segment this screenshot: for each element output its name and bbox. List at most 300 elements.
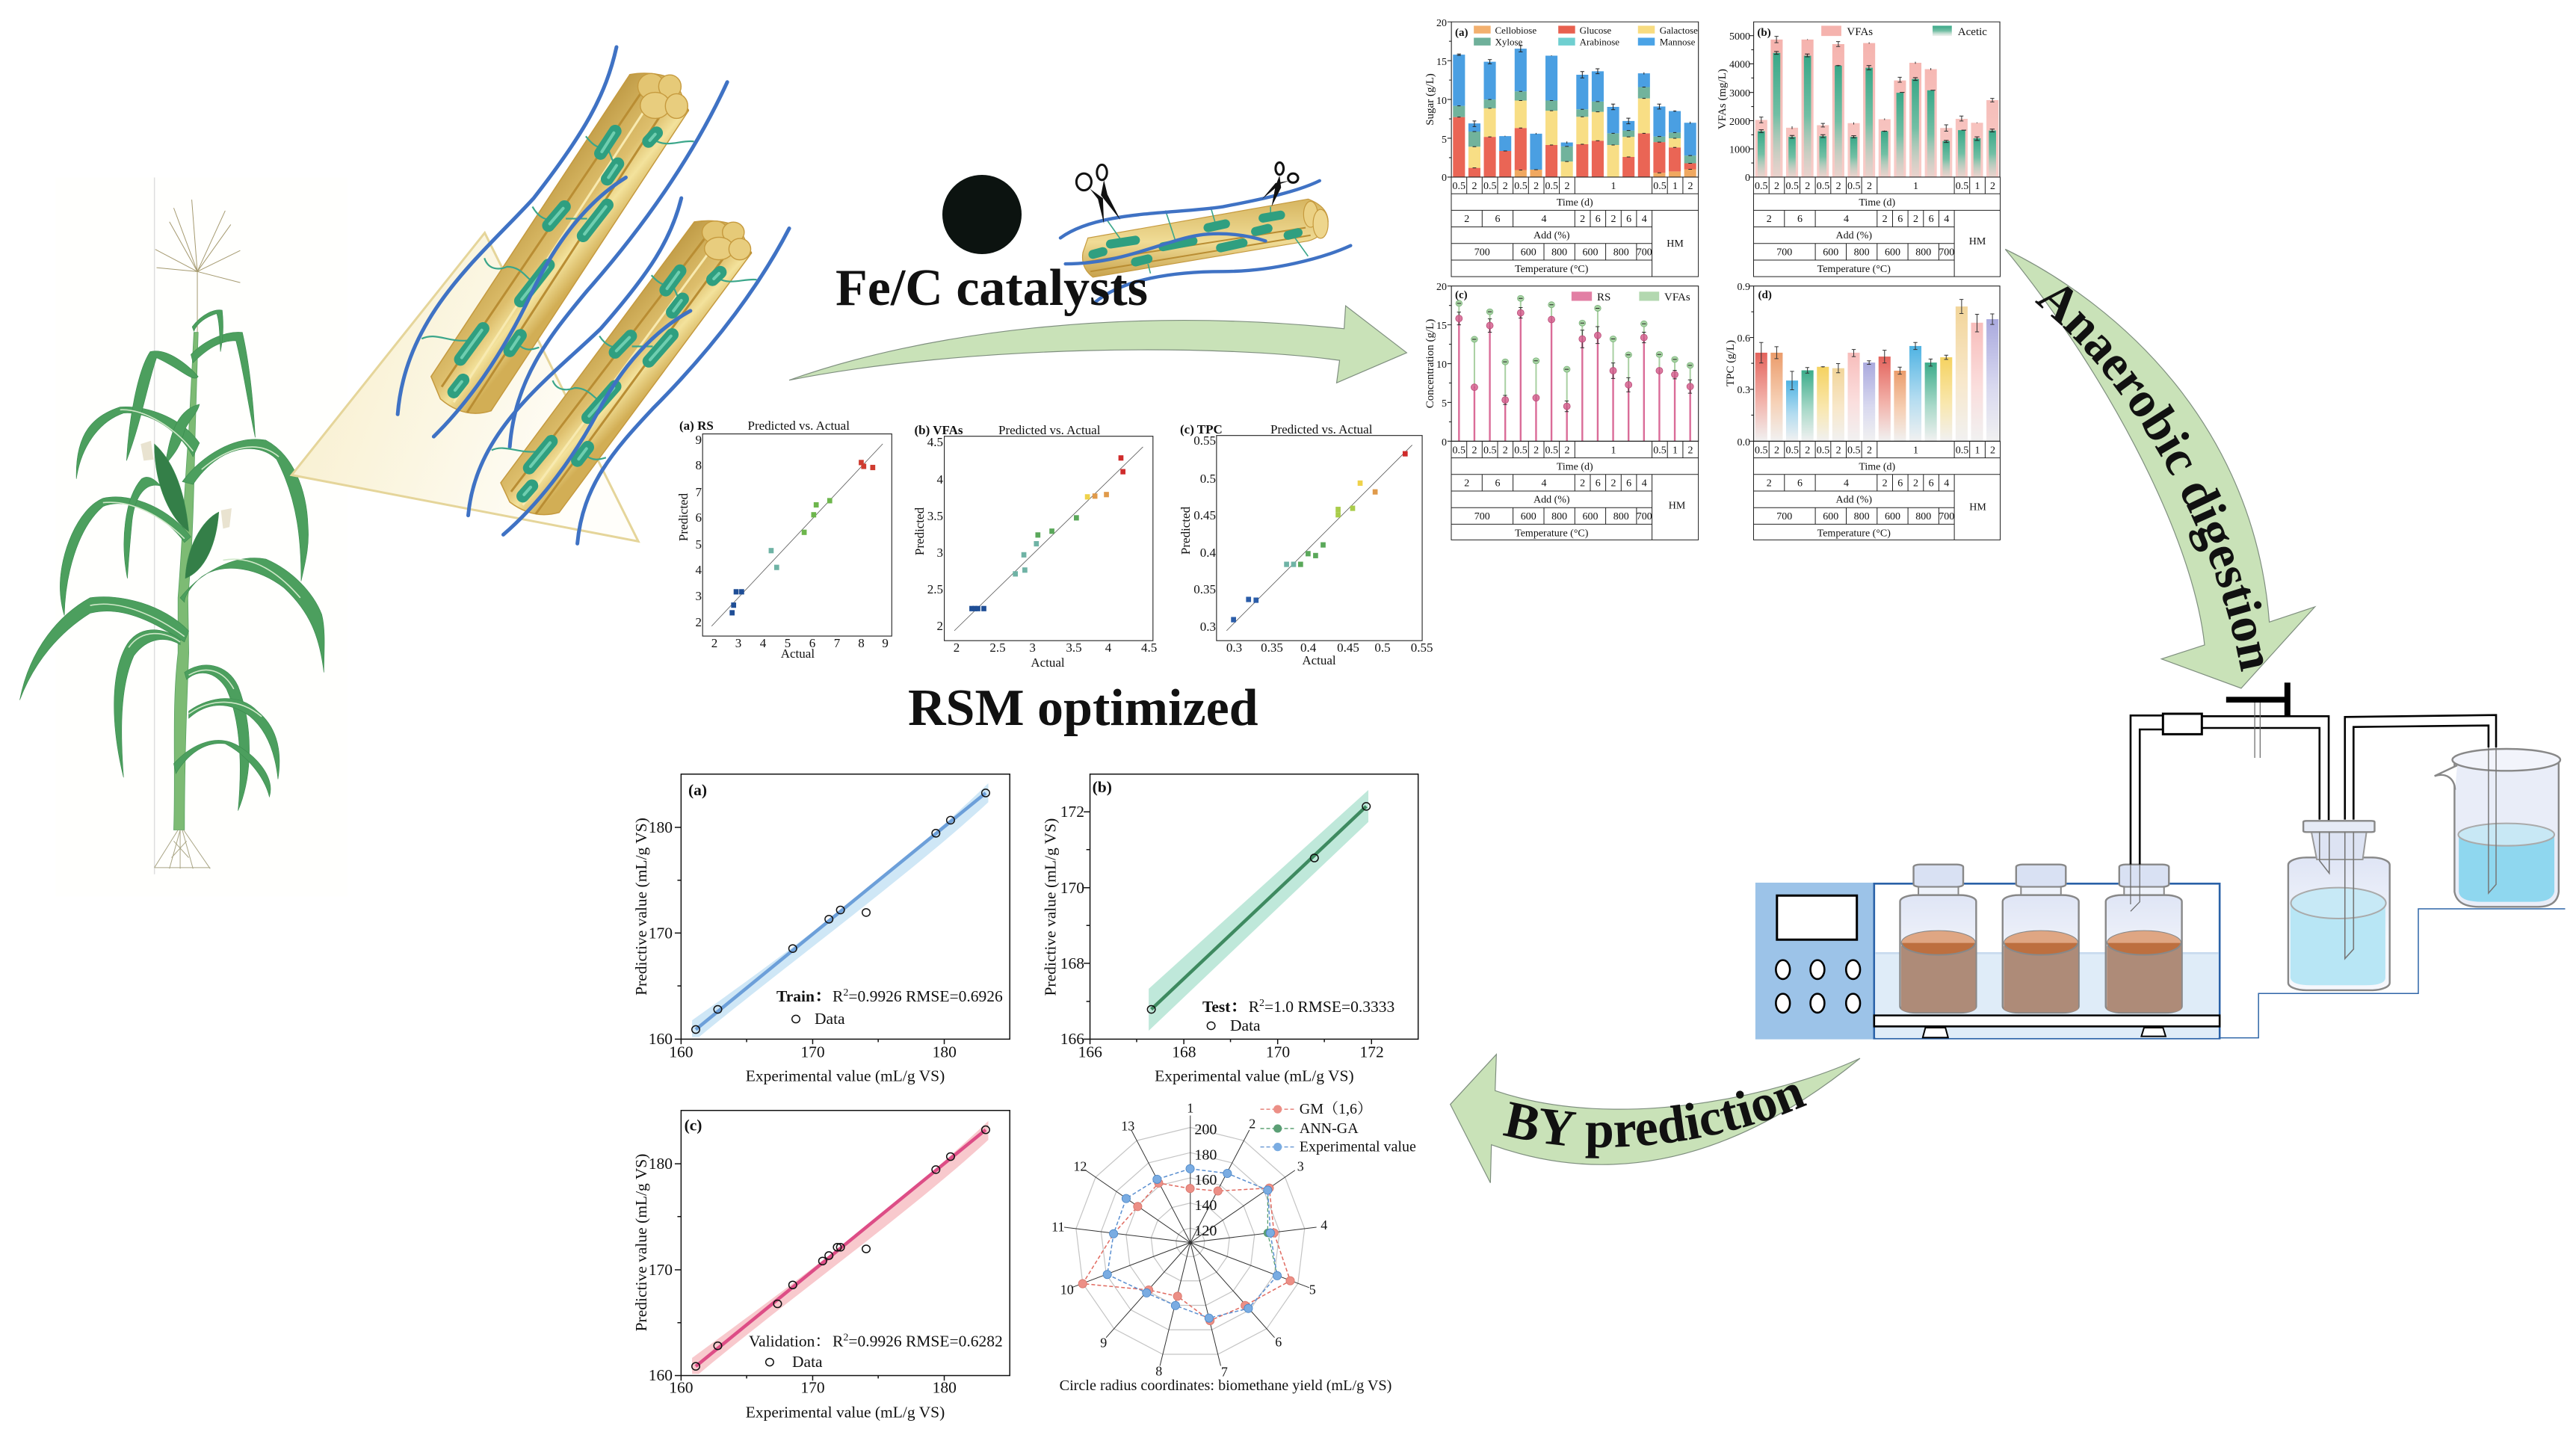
chart (c) condition table: 2 (1611, 478, 1616, 489)
chart (b) condition table: 6 (1929, 214, 1934, 225)
chart (a) condition table: 2 (1580, 214, 1585, 225)
chart (b) condition table (1753, 177, 2000, 277)
series: GM (1,6) (1078, 1179, 1294, 1325)
chart (c) text: 5 (1442, 398, 1447, 410)
chart: validation fit (c): =0.9926 RMSE=0.6282 (848, 1333, 1003, 1351)
chart (d) condition table (1753, 441, 2000, 540)
radar radial scale labels: 160 (1194, 1172, 1217, 1188)
chart: validation fit (c): R (833, 1333, 843, 1351)
chart (a) condition table: 6 (1626, 214, 1631, 225)
chart (d) text: TPC (g/L) (1725, 340, 1737, 386)
fibre bundle 1 (398, 47, 727, 447)
chart: train fit (a): Data (815, 1010, 845, 1028)
chart: test fit (b): 168 (1172, 1043, 1196, 1061)
scatter: VFAs predicted vs actual: 3 (937, 546, 943, 560)
scatter: RS predicted vs actual: 7 (695, 485, 702, 499)
chart (a) text: Galactose (1660, 25, 1698, 36)
chart (d) condition table: 1 (1913, 445, 1918, 456)
chart (d) condition table: 0.5 (1755, 445, 1768, 456)
series: experimental value (1103, 1164, 1282, 1322)
chart (d) condition table: 2 (1882, 478, 1888, 489)
chart (b) condition table: 6 (1897, 214, 1903, 225)
radar axis labels: 5 (1309, 1283, 1316, 1297)
chart (c) condition table: 6 (1495, 478, 1501, 489)
scatter: RS predicted vs actual: 4 (695, 563, 702, 577)
chart (d) condition table: 800 (1915, 511, 1931, 522)
chart (b) condition table: 4 (1844, 214, 1849, 225)
chart (a) condition table: 600 (1583, 247, 1598, 259)
chart (a) condition table: HM (1667, 238, 1684, 250)
chart (c) condition table: 0.5 (1545, 445, 1558, 456)
chart (d) condition table: 2 (1774, 445, 1779, 456)
chart (d) text: 0.6 (1737, 333, 1750, 345)
chart (c) condition table: 0.5 (1653, 445, 1667, 456)
chart (c) condition table: 0.5 (1514, 445, 1528, 456)
chart (c) condition table: 2 (1472, 445, 1477, 456)
chart (d) condition table: 6 (1897, 478, 1903, 489)
arrow: catalysts to hydrolysis charts (789, 306, 1406, 383)
chart: validation fit (c): 180 (649, 1155, 673, 1173)
chart: test fit (b) (1042, 774, 1418, 1085)
chart (a) text: Sugar (g/L) (1424, 73, 1436, 126)
fibre bundle 2 (469, 198, 789, 543)
reactor bottles (1900, 865, 2182, 1013)
chart (c) condition table: HM (1669, 500, 1686, 511)
chart (c) condition table: Temperature (°C) (1515, 528, 1589, 539)
chart (b) condition table: 2 (1867, 181, 1872, 192)
chart (d) condition table: 4 (1944, 478, 1949, 489)
chart (b) text: 0 (1745, 173, 1750, 184)
chart (a) condition table: 6 (1596, 214, 1601, 225)
scatter: RS predicted vs actual: 5 (785, 636, 791, 650)
chart (c): RS and VFA lollipop plot (1424, 282, 1699, 540)
chart (d) condition table: 1 (1974, 445, 1980, 456)
chart: train fit (a) (632, 774, 1010, 1085)
chart (b) condition table: 600 (1823, 247, 1838, 259)
chart (b) text: Acetic (1958, 26, 1987, 38)
chart (c) condition table: 2 (1503, 445, 1508, 456)
chart: test fit (b): Predictive value (mL/g VS) (1042, 818, 1060, 996)
chart: validation fit (c): (c) (685, 1117, 702, 1135)
chart (b) text (1717, 26, 1987, 184)
chart: test fit (b): =1.0 RMSE=0.3333 (1264, 998, 1394, 1016)
chart (c) condition table: 600 (1583, 511, 1598, 522)
scatter: RS predicted vs actual: 8 (858, 636, 865, 650)
scatter: TPC predicted vs actual: 0.3 (1226, 641, 1242, 655)
chart (b) condition table: 2 (1836, 181, 1841, 192)
radar axis labels: 9 (1100, 1335, 1107, 1350)
radar axis labels: 2 (1249, 1117, 1255, 1132)
chart (a) condition table: 1 (1611, 181, 1616, 192)
chart: validation fit (c): Data (792, 1353, 823, 1371)
chart (b) text: 5000 (1729, 31, 1750, 43)
chart: train fit (a): 160 (649, 1030, 673, 1048)
anaerobic digestion apparatus (1755, 682, 2565, 1040)
chart (c) condition table: 700 (1474, 511, 1490, 522)
chart: validation fit (c): Predictive value (mL/g VS) (632, 1154, 650, 1331)
scatter: VFAs predicted vs actual (912, 423, 1157, 670)
chart (d) text: 0.0 (1737, 437, 1750, 448)
chart: train fit (a): Train： (776, 987, 830, 1005)
scatter: RS predicted vs actual: 9 (695, 433, 702, 447)
radar legend markers (1261, 1105, 1294, 1151)
scatter: TPC predicted vs actual: 0.45 (1193, 508, 1216, 522)
chart (c) condition table: 800 (1551, 511, 1567, 522)
radar chart: biomethane yield model comparison (1051, 1100, 1416, 1394)
chart (a) text (1424, 18, 1698, 184)
chart (a) text: (a) (1455, 27, 1468, 39)
scatter: TPC predicted vs actual: (c) TPC (1180, 422, 1223, 436)
icon: left scissors (1076, 164, 1120, 223)
radar axis labels: 3 (1297, 1158, 1304, 1173)
chart (b) text: VFAs (mg/L) (1717, 69, 1729, 129)
chart: train fit (a): R (833, 987, 843, 1005)
scatter: VFAs predicted vs actual: 2.5 (927, 582, 943, 596)
scatter: VFAs predicted vs actual: Predicted (912, 507, 927, 555)
chart: validation fit (c): 170 (800, 1378, 825, 1396)
chart: test fit (b): 168 (1060, 954, 1084, 972)
scatter: RS predicted vs actual: 6 (695, 510, 702, 525)
scatter: TPC predicted vs actual: 0.45 (1337, 641, 1359, 655)
chart: validation fit (c): 180 (933, 1378, 957, 1396)
chart: validation fit (c): 2 (843, 1333, 848, 1344)
scatter: VFAs predicted vs actual: 3.5 (927, 509, 943, 523)
chart (a) condition table: Time (d) (1557, 197, 1593, 209)
chart: train fit (a): =0.9926 RMSE=0.6926 (848, 987, 1003, 1005)
chart: test fit (b): 166 (1078, 1043, 1102, 1061)
chart: train fit (a): 160 (669, 1043, 694, 1061)
chart (d) condition table: 2 (1867, 445, 1872, 456)
arrow: BY prediction (1450, 1053, 1861, 1183)
radar axis labels: 7 (1221, 1365, 1228, 1380)
chart (d) condition table: 0.5 (1817, 445, 1829, 456)
chart: validation fit (c) (632, 1111, 1010, 1422)
chart (b) condition table: 6 (1797, 214, 1803, 225)
chart (a) text: Xylose (1495, 37, 1523, 48)
chart (c) condition table: 2 (1687, 445, 1693, 456)
chart (c) condition table (1451, 441, 1699, 540)
chart: validation fit (c): 160 (669, 1378, 694, 1396)
chart: test fit (b): 172 (1359, 1043, 1384, 1061)
chart (c) text: RS (1597, 291, 1610, 303)
scatter: RS predicted vs actual: 4 (760, 636, 767, 650)
chart (c) condition table: 0.5 (1483, 445, 1496, 456)
radar radial scale labels: 200 (1194, 1122, 1217, 1138)
scatter: TPC predicted vs actual: 0.4 (1300, 641, 1317, 655)
chart (c) condition table: 1 (1672, 445, 1678, 456)
chart (b) condition table: HM (1969, 236, 1986, 247)
chart (c) condition table: 6 (1596, 478, 1601, 489)
heading: RSM optimized: RSM optimized (908, 679, 1258, 737)
stepped platform line (2220, 909, 2565, 1038)
scatter: RS predicted vs actual: 8 (695, 458, 702, 472)
chart (d) condition table: 600 (1885, 511, 1900, 522)
scatter: VFAs predicted vs actual: 4.5 (1141, 641, 1157, 655)
chart (b) condition table: 0.5 (1817, 181, 1829, 192)
chart (a) condition table: 2 (1611, 214, 1616, 225)
chart: train fit (a): 2 (843, 987, 848, 999)
radar legend text: ANN-GA (1300, 1120, 1359, 1137)
radar axis labels: 13 (1121, 1118, 1134, 1133)
chart: validation fit (c): 170 (649, 1261, 673, 1279)
chart (b) condition table: 2 (1767, 214, 1772, 225)
chart (d) condition table: 2 (1990, 445, 1995, 456)
chart (d) condition table: 2 (1836, 445, 1841, 456)
chart (b) text: VFAs (1847, 26, 1873, 38)
radar radial scale labels (1194, 1122, 1217, 1239)
scatter: TPC predicted vs actual: 0.3 (1200, 620, 1216, 634)
chart: test fit (b): 172 (1060, 803, 1084, 821)
chart (b) text: (b) (1757, 27, 1771, 39)
chart (c) text: VFAs (1664, 291, 1690, 303)
chart (a) text: Arabinose (1580, 37, 1619, 48)
chart (a) condition table: 600 (1521, 247, 1536, 259)
chart: test fit (b): R (1249, 998, 1259, 1016)
scatter: TPC predicted vs actual: Actual (1302, 653, 1336, 667)
scatter: VFAs predicted vs actual: 2 (954, 641, 960, 655)
radar axis labels: 1 (1187, 1100, 1193, 1115)
chart (c) condition table: 700 (1637, 511, 1652, 522)
scatter: TPC predicted vs actual: 0.35 (1193, 582, 1216, 596)
chart (a) condition table: 6 (1495, 214, 1501, 225)
chart (d) condition table: 600 (1823, 511, 1838, 522)
lignocellulose fibre bundles (398, 47, 789, 543)
scatter: VFAs predicted vs actual: Predicted vs. Actual (998, 423, 1101, 437)
chart (a) condition table: 800 (1613, 247, 1629, 259)
chart: train fit (a): 170 (649, 924, 673, 942)
chart (c) condition table: 4 (1541, 478, 1547, 489)
radar radial scale labels: 180 (1194, 1146, 1217, 1163)
chart (d) condition table: 0.5 (1785, 445, 1799, 456)
chart (b) condition table: 4 (1944, 214, 1949, 225)
beaker (2435, 747, 2560, 907)
chart (b) condition table: 1 (1913, 181, 1918, 192)
chart: train fit (a): 170 (800, 1043, 825, 1061)
chart: test fit (b): Experimental value (mL/g VS) (1155, 1067, 1354, 1085)
corn plant illustration (19, 178, 348, 896)
scatter: VFAs predicted vs actual: 2.5 (989, 641, 1006, 655)
chart (c) condition table: 2 (1464, 478, 1469, 489)
chart (d) condition table: 2 (1913, 478, 1918, 489)
chart (c) text: Concentration (g/L) (1424, 319, 1436, 408)
chart (b) condition table: 2 (1913, 214, 1918, 225)
chart (d) text: 0.3 (1737, 385, 1750, 396)
label: BY prediction: BY prediction (1502, 1085, 1807, 1158)
chart (c) condition table: 4 (1642, 478, 1647, 489)
chart (c) condition table: 2 (1580, 478, 1585, 489)
chart: train fit (a): 180 (933, 1043, 957, 1061)
chart (c) text: 20 (1436, 282, 1447, 293)
chart (d) condition table: HM (1969, 501, 1986, 513)
chart: test fit (b): (b) (1093, 778, 1112, 796)
control unit (1755, 883, 1874, 1040)
chart (a) text: 5 (1442, 135, 1447, 146)
gas pipes and valve (2131, 682, 2496, 911)
chart (a) condition table (1451, 177, 1699, 277)
chart (a) condition table: 2 (1565, 181, 1569, 192)
radar legend text (1300, 1101, 1416, 1155)
chart (b) condition table: 0.5 (1785, 181, 1799, 192)
scatter: VFAs predicted vs actual: (b) VFAs (915, 423, 963, 437)
scatter: RS predicted vs actual: 2 (695, 615, 702, 629)
chart (b) text: 4000 (1729, 60, 1750, 70)
chart (d) condition table: Add (%) (1835, 494, 1872, 505)
radar axis labels: 11 (1051, 1220, 1064, 1235)
chart (a) condition table: 800 (1551, 247, 1567, 259)
chart (b) condition table: 2 (1805, 181, 1810, 192)
chart (b) condition table: Temperature (°C) (1817, 264, 1891, 275)
radar axis labels: 12 (1073, 1158, 1087, 1173)
chart: test fit (b): 166 (1060, 1030, 1084, 1048)
chart (a) condition table: 0.5 (1545, 181, 1558, 192)
scatter: RS predicted vs actual: Predicted (676, 493, 691, 541)
scatter: RS predicted vs actual: 3 (735, 636, 741, 650)
icon: right scissors (1262, 162, 1298, 207)
legend swatches (1474, 25, 1655, 46)
chart (b) condition table: 2 (1882, 214, 1888, 225)
chart (b) text: 3000 (1729, 88, 1750, 99)
scatter: TPC predicted vs actual: Predicted vs. Actual (1270, 422, 1373, 436)
chart (d): TPC gradient bars (1725, 282, 2000, 540)
chart: validation fit (c): Validation： (749, 1333, 831, 1351)
scatter: TPC predicted vs actual: 0.5 (1200, 472, 1216, 486)
chart (c) condition table: Time (d) (1557, 461, 1593, 472)
chart: train fit (a): 180 (649, 818, 673, 836)
chart (b) text: 1000 (1729, 145, 1750, 155)
Fe/C catalyst black particle (942, 175, 1022, 254)
scatter: RS predicted vs actual: 9 (882, 636, 889, 650)
chart (b) condition table: 0.5 (1847, 181, 1861, 192)
chart (c) condition table: 600 (1521, 511, 1536, 522)
chart (a) condition table: 0.5 (1653, 181, 1667, 192)
heading: Fe/C catalysts: Fe/C catalysts (835, 259, 1148, 317)
chart (d) condition table: 6 (1929, 478, 1934, 489)
chart (d) condition table: 700 (1939, 511, 1954, 522)
chart (d) condition table: 0.5 (1956, 445, 1968, 456)
chart (b) text: 2000 (1729, 117, 1750, 128)
chart (a) text: 15 (1436, 57, 1447, 68)
chart (c) text (1424, 282, 1690, 448)
series: ANN-GA (1264, 1190, 1277, 1276)
chart (c) condition table: 2 (1565, 445, 1569, 456)
chart: test fit (b): 170 (1266, 1043, 1290, 1061)
legend swatches (1821, 25, 1952, 36)
chart (c) condition table: 1 (1611, 445, 1616, 456)
scatter: TPC predicted vs actual: Predicted (1179, 506, 1193, 555)
scatter: TPC predicted vs actual: 0.4 (1200, 546, 1217, 560)
label: Anaerobic digestion: Anaerobic digestion (2034, 286, 2263, 672)
chart (a) condition table: 2 (1687, 181, 1693, 192)
chart (c) text: 10 (1436, 359, 1447, 371)
chart (d) condition table: Temperature (°C) (1817, 528, 1891, 539)
scatter: VFAs predicted vs actual: 4.5 (927, 435, 943, 449)
chart (b) condition table: 2 (1774, 181, 1779, 192)
scatter: RS predicted vs actual: (a) RS (679, 419, 714, 433)
chart (a) text: Cellobiose (1495, 25, 1536, 36)
chart (d) text: 0.9 (1737, 282, 1750, 293)
chart (a) text: Mannose (1660, 37, 1696, 48)
chart: test fit (b): Data (1230, 1016, 1261, 1034)
chart (c) text: (c) (1455, 289, 1468, 301)
scatter: VFAs predicted vs actual: 3 (1029, 641, 1036, 655)
scatter: RS predicted vs actual: 7 (834, 636, 841, 650)
chart (d) condition table: Time (d) (1859, 461, 1896, 472)
chart: validation fit (c): Experimental value (mL/g VS) (746, 1404, 945, 1422)
chart (b) condition table: 2 (1990, 181, 1995, 192)
radar legend text: Experimental value (1300, 1139, 1416, 1155)
chart (b) condition table: 700 (1939, 247, 1954, 259)
chart (b) condition table: 800 (1915, 247, 1931, 259)
chart (b) condition table: 600 (1885, 247, 1900, 259)
chart (c) condition table: 800 (1613, 511, 1629, 522)
chart (b) condition table: 0.5 (1956, 181, 1968, 192)
chart (c) condition table: 0.5 (1453, 445, 1465, 456)
chart: train fit (a): (a) (688, 781, 707, 799)
radar caption: Circle radius coordinates: biomethane yield (mL/g VS) (1060, 1377, 1392, 1394)
chart (d) condition table: 6 (1797, 478, 1803, 489)
radar axis labels: 10 (1060, 1283, 1074, 1297)
scatter: RS predicted vs actual: 5 (695, 537, 702, 552)
chart (a) text: Glucose (1580, 25, 1611, 36)
chart (a) condition table: 1 (1672, 181, 1678, 192)
gas washing bottle (2288, 821, 2390, 990)
chart (a) condition table: 0.5 (1483, 181, 1496, 192)
radar axis labels: 6 (1275, 1335, 1282, 1350)
chart (a) condition table: 0.5 (1514, 181, 1528, 192)
chart (a) condition table: 2 (1472, 181, 1477, 192)
chart (d) text: (d) (1758, 289, 1772, 301)
chart (b): VFAs and acetic bars (1717, 22, 2000, 277)
chart (b) condition table: 0.5 (1755, 181, 1768, 192)
chart (b) condition table: 800 (1854, 247, 1870, 259)
chart: test fit (b): Test： (1202, 998, 1247, 1016)
chart: train fit (a): Experimental value (mL/g VS) (746, 1067, 945, 1085)
arrow: anaerobic digestion (2004, 248, 2317, 689)
radar legend text: GM（1,6） (1300, 1101, 1372, 1117)
chart (d) condition table: 4 (1844, 478, 1849, 489)
legend swatches (1572, 291, 1659, 301)
chart (d) condition table: 2 (1767, 478, 1772, 489)
chart (d) condition table: 800 (1854, 511, 1870, 522)
scatter: RS predicted vs actual: 3 (695, 589, 702, 603)
scatter: VFAs predicted vs actual: 4 (1105, 641, 1112, 655)
chart (a) condition table: 0.5 (1453, 181, 1465, 192)
chart: test fit (b): 170 (1060, 879, 1084, 897)
scatter: VFAs predicted vs actual: 3.5 (1066, 641, 1082, 655)
chart (a) text: 20 (1436, 18, 1447, 29)
chart (d) condition table: 2 (1805, 445, 1810, 456)
scatter: RS predicted vs actual (676, 419, 892, 661)
chart: train fit (a): Predictive value (mL/g VS) (632, 818, 650, 996)
catalytic cutting of fibre illustration (1060, 162, 1350, 302)
chart (b) condition table: Add (%) (1835, 230, 1872, 241)
chart (a) condition table: 2 (1533, 181, 1539, 192)
scatter: RS predicted vs actual: Predicted vs. Actual (747, 419, 850, 433)
chart (d) text (1725, 282, 1772, 448)
chart (c) condition table: 6 (1626, 478, 1631, 489)
scatter: VFAs predicted vs actual: 4 (937, 472, 943, 487)
scatter: TPC predicted vs actual: 0.55 (1411, 641, 1433, 655)
chart (d) condition table: 0.5 (1847, 445, 1861, 456)
chart (c) condition table: 2 (1533, 445, 1539, 456)
zoom triangle linking plant to fibres (291, 233, 638, 541)
scatter: TPC predicted vs actual (1179, 422, 1433, 667)
chart (c) text: 15 (1436, 321, 1447, 332)
radar radial scale labels: 120 (1194, 1223, 1217, 1239)
chart (a): sugar stacked bars (1424, 18, 1699, 277)
scatter: TPC predicted vs actual: 0.5 (1374, 641, 1391, 655)
chart (a) condition table: 4 (1541, 214, 1547, 225)
